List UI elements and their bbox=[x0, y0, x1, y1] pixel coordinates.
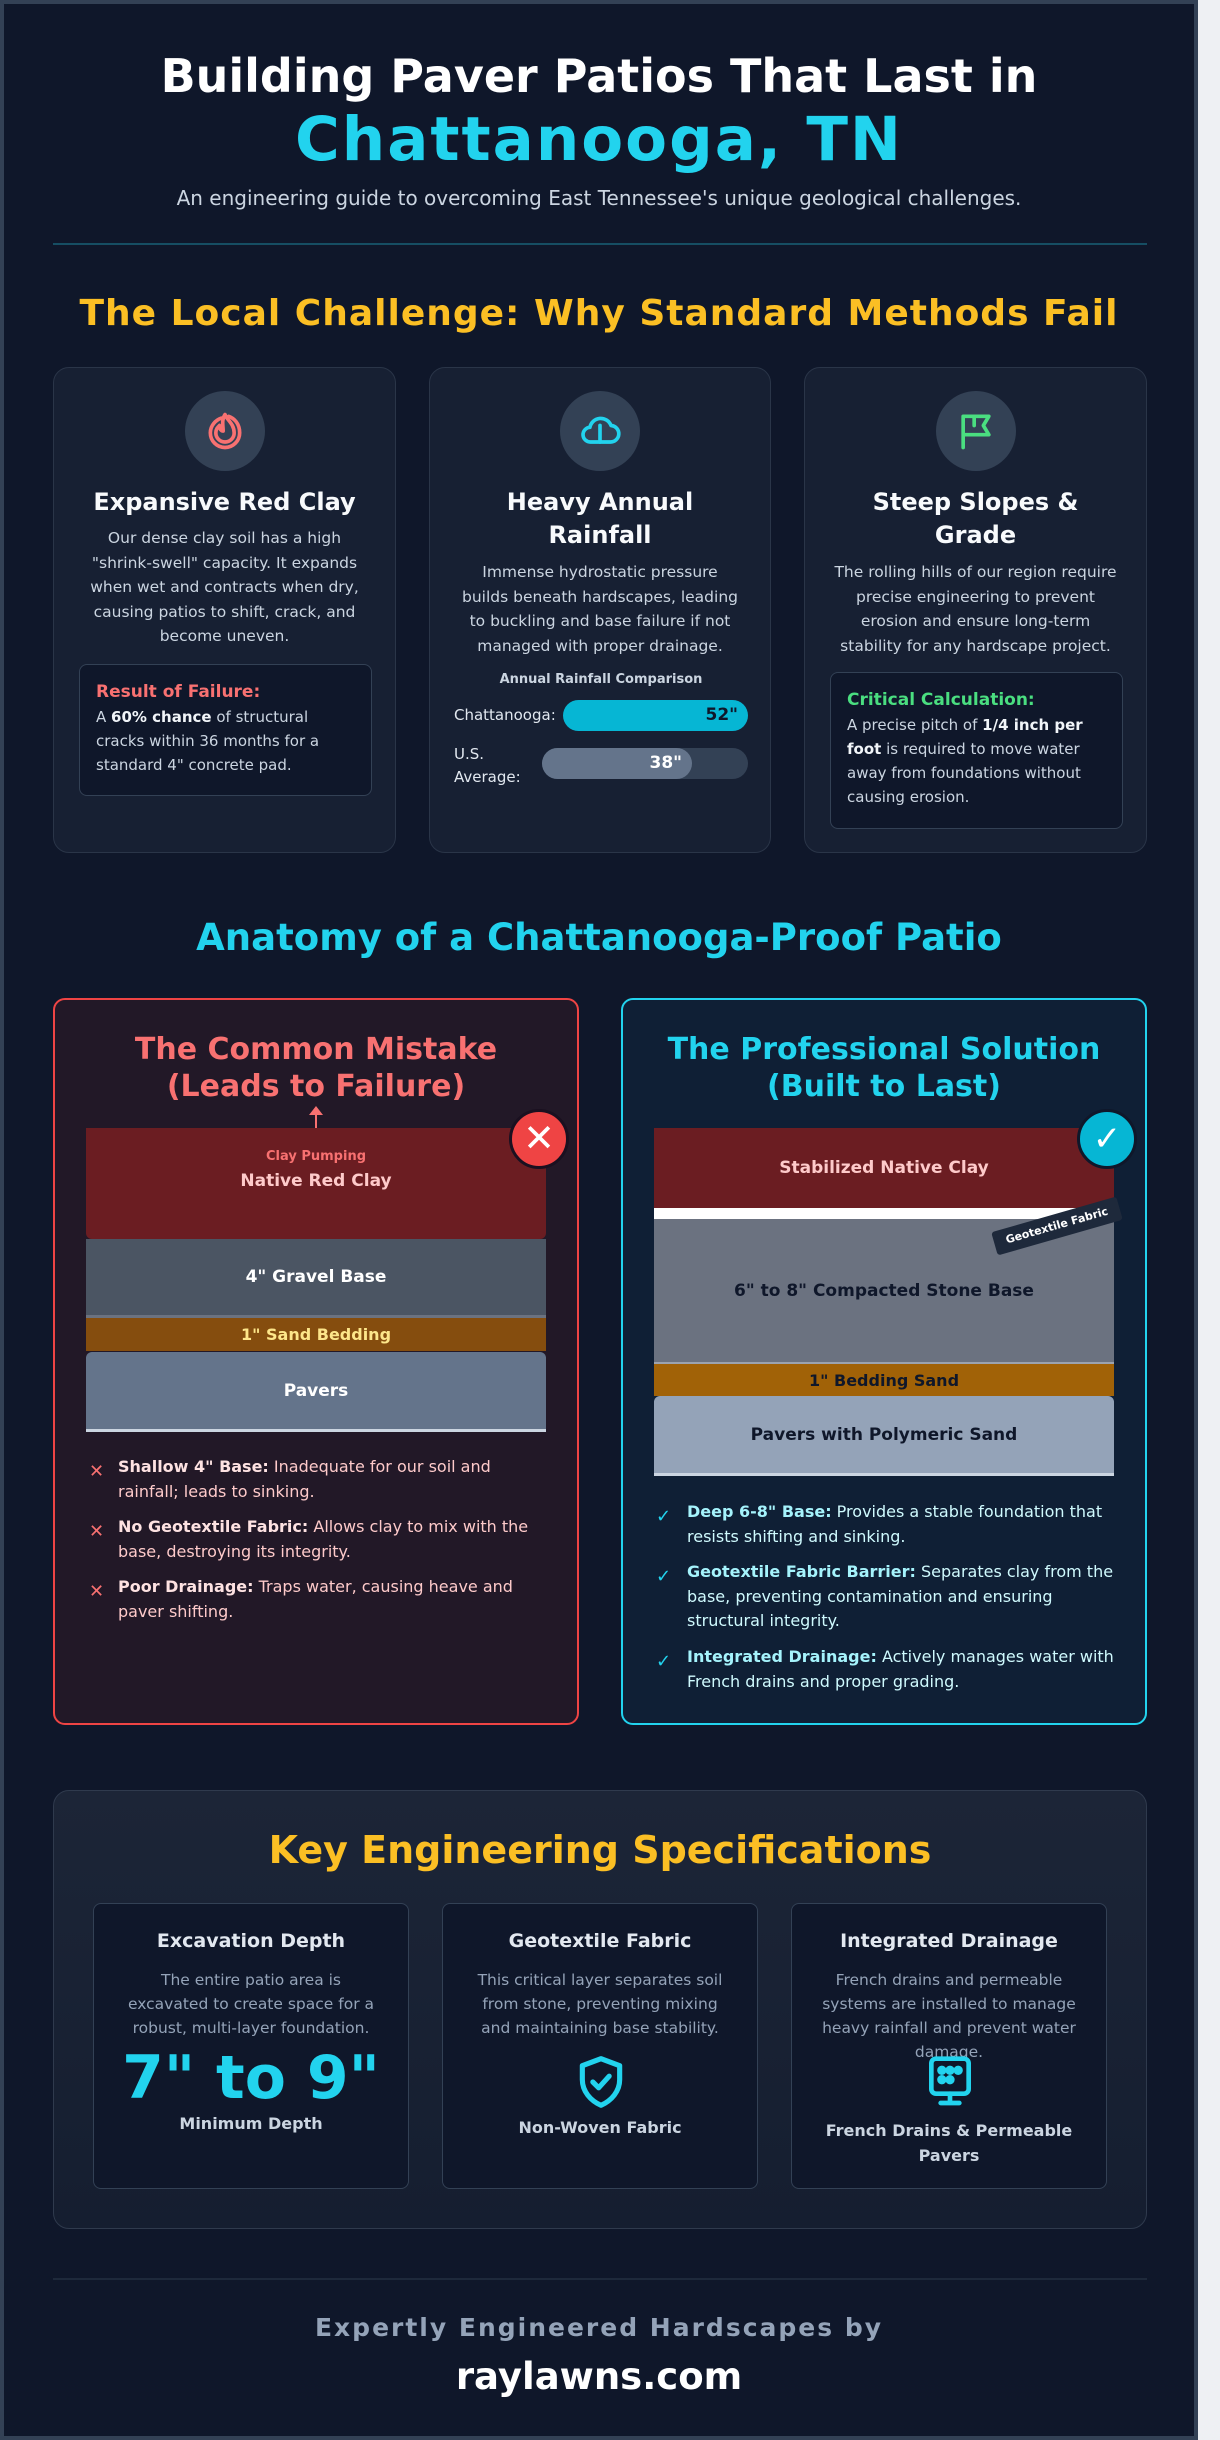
spec: excavation depth bbox=[93, 1903, 409, 2189]
panel: professional solution bbox=[621, 998, 1147, 1725]
list: mistakes: ✕ bbox=[89, 1581, 104, 1602]
callout: result of failure: A 60% chance of structural cracks within 36 months for a standard 4" concrete pad. bbox=[96, 708, 319, 774]
spec: integrated drainage: Integrated Drainage bbox=[840, 1930, 1058, 1952]
icon: shield bbox=[580, 2056, 622, 2108]
panel: expansive red clay bbox=[53, 367, 396, 853]
spec: geotextile fabric: Geotextile Fabric bbox=[509, 1930, 691, 1952]
list: solutions: ✓ bbox=[656, 1566, 671, 1587]
icon: cloud bbox=[560, 391, 640, 471]
label: geotextile fabric: Geotextile Fabric bbox=[1004, 1205, 1110, 1246]
diagram: failing layers bbox=[86, 1106, 546, 1432]
diagram: engineered layers: 6" to 8" Compacted Stone Base bbox=[734, 1280, 1034, 1300]
diagram: engineered layers: Stabilized Native Clay bbox=[779, 1158, 989, 1178]
panel: heavy rainfall bbox=[429, 367, 771, 853]
list: mistakes: ✕ bbox=[89, 1521, 104, 1542]
panel heading: The Professional Solution bbox=[668, 1032, 1100, 1067]
bar chart: rainfall: Annual Rainfall Comparison bbox=[500, 672, 702, 687]
spec: integrated drainage: French drains and permeable systems are installed to manage heavy rainfall and prevent water damage. bbox=[822, 1971, 1076, 2061]
callout: critical calculation: Critical Calculation: bbox=[847, 690, 1035, 710]
diagram: failing layers: 1" Sand Bedding bbox=[241, 1325, 391, 1344]
callout: critical calculation bbox=[830, 672, 1123, 829]
panel: steep slopes bbox=[804, 367, 1147, 853]
diagram: failing layers: Native Red Clay bbox=[240, 1171, 392, 1191]
diagram: failing layers: Pavers bbox=[284, 1380, 348, 1400]
section heading: anatomy: Anatomy of a Chattanooga-Proof Patio bbox=[196, 916, 1002, 959]
card title: Steep Slopes & bbox=[873, 488, 1078, 516]
diagram: failing layers: 4" Gravel Base bbox=[246, 1267, 386, 1287]
list: solutions bbox=[656, 1502, 1114, 1690]
bar chart: rainfall: U.S. bbox=[454, 745, 484, 763]
heading: key specs: Key Engineering Specifications bbox=[269, 1828, 931, 1872]
card title bbox=[873, 488, 1078, 549]
panel heading bbox=[135, 1032, 497, 1104]
spec: geotextile fabric bbox=[442, 1903, 758, 2189]
spec: integrated drainage: French Drains & Permeable Pavers bbox=[826, 2121, 1072, 2165]
footer bbox=[315, 2313, 883, 2398]
list: mistakes bbox=[89, 1457, 528, 1620]
spec: integrated drainage bbox=[791, 1903, 1107, 2189]
spec: excavation depth: The entire patio area is excavated to create space for a robust, multi-layer foundation. bbox=[128, 1971, 374, 2037]
section heading: local challenge: The Local Challenge: Why Standard Methods Fail bbox=[79, 293, 1118, 334]
spec: geotextile fabric: Non-Woven Fabric bbox=[518, 2118, 682, 2137]
bar chart: rainfall: 52" bbox=[705, 705, 738, 725]
icon: failure x badge: ✕ bbox=[523, 1116, 555, 1160]
icon: flag bbox=[936, 391, 1016, 471]
panel heading: (Built to Last) bbox=[767, 1069, 1001, 1104]
spec: excavation depth: Minimum Depth bbox=[179, 2114, 323, 2133]
icon: flame bbox=[184, 391, 264, 471]
diagram: engineered layers: 1" Bedding Sand bbox=[809, 1370, 959, 1390]
title: Building Paver Patios That Last in bbox=[161, 49, 1037, 103]
card title: Expansive Red Clay bbox=[93, 488, 356, 516]
list: mistakes: No Geotextile Fabric: Allows clay to mix with the base, destroying its integrity. bbox=[118, 1517, 528, 1560]
footer: Expertly Engineered Hardscapes by bbox=[315, 2313, 883, 2342]
icon: failure x badge bbox=[509, 1109, 569, 1169]
list: mistakes: Poor Drainage: Traps water, causing heave and paver shifting. bbox=[118, 1577, 513, 1620]
big number: 7" to 9" bbox=[122, 2043, 380, 2113]
footer: raylawns.com bbox=[456, 2355, 742, 2398]
label: geotextile fabric bbox=[991, 1197, 1123, 1255]
title highlight: Chattanooga, TN bbox=[295, 104, 903, 175]
description: Our dense clay soil has a high "shrink-swell" capacity. It expands when wet and contracts when dry, causing patios to shift, crack, and become uneven. bbox=[90, 529, 359, 645]
diagram: engineered layers: Pavers with Polymeric Sand bbox=[751, 1424, 1017, 1444]
list: mistakes: Shallow 4" Base: Inadequate for our soil and rainfall; leads to sinking. bbox=[118, 1457, 491, 1500]
diagram: engineered layers bbox=[654, 1128, 1122, 1476]
spec: geotextile fabric: This critical layer separates soil from stone, preventing mixing and maintaining base stability. bbox=[478, 1971, 722, 2037]
description: The rolling hills of our region require precise engineering to prevent erosion and ensure long-term stability for any hardscape project. bbox=[834, 563, 1117, 654]
panel: common mistake bbox=[53, 998, 579, 1725]
card title: Grade bbox=[935, 521, 1016, 549]
list: solutions: ✓ bbox=[656, 1651, 671, 1672]
list: solutions: Integrated Drainage: Actively manages water with French drains and proper grading. bbox=[687, 1647, 1114, 1690]
bar chart: rainfall: 38" bbox=[649, 753, 682, 773]
bar chart: rainfall: Average: bbox=[454, 768, 521, 786]
callout: result of failure bbox=[79, 664, 372, 796]
bar chart: rainfall bbox=[454, 672, 748, 786]
diagram: failing layers: Clay Pumping bbox=[266, 1149, 366, 1164]
card title: Heavy Annual bbox=[507, 488, 693, 516]
panel heading: The Common Mistake bbox=[135, 1032, 497, 1067]
callout: critical calculation: A precise pitch of 1/4 inch per foot is required to move water away from foundations without causing erosion. bbox=[847, 716, 1083, 806]
list: solutions: Deep 6-8" Base: Provides a stable foundation that resists shifting and sinking. bbox=[687, 1502, 1102, 1546]
description: Immense hydrostatic pressure builds beneath hardscapes, leading to buckling and base failure if not managed with proper drainage. bbox=[462, 563, 738, 654]
arrow: clay pumping bbox=[315, 1108, 317, 1146]
panel heading bbox=[668, 1032, 1100, 1104]
list: solutions: ✓ bbox=[656, 1506, 671, 1527]
icon: check badge: ✓ bbox=[1093, 1119, 1121, 1159]
callout: result of failure: Result of Failure: bbox=[96, 682, 260, 702]
subtitle: An engineering guide to overcoming East Tennessee's unique geological challenges. bbox=[177, 186, 1021, 210]
icon: check badge bbox=[1077, 1109, 1137, 1169]
spec: excavation depth: Excavation Depth bbox=[157, 1930, 345, 1952]
bar chart: rainfall: Chattanooga: bbox=[454, 706, 556, 724]
list: mistakes: ✕ bbox=[89, 1461, 104, 1482]
panel heading: (Leads to Failure) bbox=[167, 1069, 465, 1104]
list: solutions: Geotextile Fabric Barrier: Separates clay from the base, preventing contamination and ensuring structural integrity. bbox=[687, 1562, 1113, 1630]
card title bbox=[507, 488, 693, 549]
panel: key engineering specifications bbox=[53, 1790, 1147, 2229]
card title: Rainfall bbox=[548, 521, 652, 549]
icon: drain bbox=[929, 2056, 971, 2106]
